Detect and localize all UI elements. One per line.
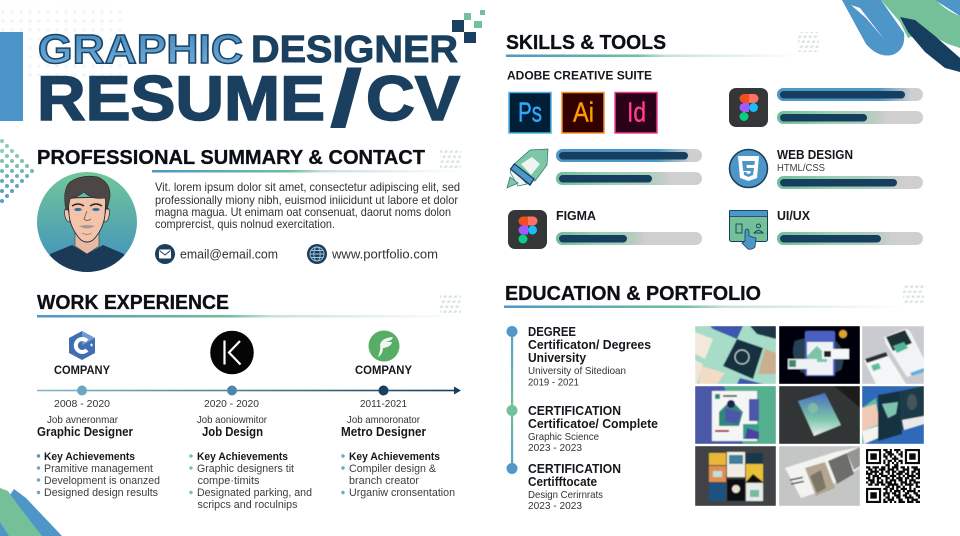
skill: web design <box>777 148 923 189</box>
thumbnail: dark card <box>779 386 860 444</box>
subheading: adobe: ADOBE CREATIVE SUITE <box>507 68 652 82</box>
achievements: scripcs and roculnips <box>198 499 298 511</box>
dot pattern <box>440 293 461 313</box>
skill bars: brush <box>556 149 702 185</box>
portfolio address: www.portfolio.com <box>331 246 438 262</box>
thumbnail: poster set on dark <box>695 446 776 506</box>
email address: email@email.com <box>180 246 278 262</box>
dates: 2008 - 2020 <box>54 398 110 410</box>
thumbnail: phone mockups <box>862 326 924 384</box>
achievements: Pramitive management <box>44 463 153 475</box>
education entry: certification two: Certifftocate <box>528 475 597 489</box>
heading: professional summary: PROFESSIONAL SUMMARY & CONTACT <box>37 146 425 169</box>
job title: Job Design <box>202 425 263 439</box>
brush stroke: top right <box>842 0 960 72</box>
panel: education and portfolio <box>504 282 924 512</box>
job subtitle: Job aoniowmitor <box>197 414 267 426</box>
dot pattern <box>798 32 819 52</box>
pixel square accent <box>452 10 485 43</box>
job subtitle: Job amnoronator <box>347 414 420 426</box>
brush stroke: bottom left <box>0 488 62 536</box>
skill: figma: FIGMA <box>556 209 596 223</box>
education entry: certification two: Design Cerirnrats <box>528 489 603 501</box>
title: CV <box>366 64 460 134</box>
education entry: certification one <box>528 404 658 454</box>
job 3 <box>341 330 455 499</box>
achievements: Key Achievements <box>197 451 288 463</box>
education entry: certification two: CERTIFICATION <box>528 462 621 476</box>
dot pattern <box>440 148 461 168</box>
skill bars: top right <box>777 88 923 124</box>
thumbnail: brochure <box>862 386 924 444</box>
QR code <box>862 446 924 506</box>
achievements <box>189 451 312 511</box>
skill: figma <box>556 209 702 245</box>
job subtitle: Job avneronmar <box>47 414 118 426</box>
icon: highlighter brush <box>507 149 548 188</box>
education entry: degree: University <box>528 351 586 365</box>
education entry: certification one: 2023 - 2023 <box>528 442 582 454</box>
title <box>37 26 460 143</box>
panel: skills and tools <box>506 31 923 249</box>
icon: InDesign: Id <box>627 96 646 128</box>
heading underline <box>37 315 462 318</box>
heading underline <box>504 306 904 308</box>
icon: green F logo <box>368 330 400 362</box>
heading underline <box>152 170 462 172</box>
panel: professional summary and contact <box>37 146 462 280</box>
achievements: Key Achievements <box>44 451 135 463</box>
education entry: certification one: CERTIFICATION <box>528 404 621 418</box>
achievements: Development is onanzed <box>44 475 160 487</box>
skill: ui/ux: UI/UX <box>777 209 811 223</box>
heading: education and portfolio: EDUCATION & PORTFOLIO <box>505 282 761 305</box>
job title: Graphic Designer <box>37 425 133 439</box>
achievements: compe·timits <box>198 475 260 487</box>
thumbnail: illustrated poster <box>695 386 776 444</box>
icon: UI/UX window with hand <box>730 210 768 249</box>
achievements: Graphic designers tit <box>197 463 294 475</box>
icon: K logo <box>210 331 254 374</box>
company name: COMPANY <box>54 365 110 377</box>
dot pattern <box>903 284 924 304</box>
skill: web design: WEB DESIGN <box>777 148 853 162</box>
icon: Illustrator: Ai <box>573 96 594 128</box>
achievements: branch creator <box>349 475 419 487</box>
achievements <box>341 451 455 499</box>
title: DESIGNER <box>251 29 458 71</box>
icon: globe <box>307 244 327 264</box>
education timeline <box>506 326 518 474</box>
achievements: Compiler design & <box>349 463 437 475</box>
education entry: certification one: Certificatoe/ Complete <box>528 417 658 431</box>
education entry: degree: DEGREE <box>528 325 576 339</box>
icon: CSS shield <box>730 150 768 188</box>
education entry: degree: University of Sitedioan <box>528 365 626 377</box>
icon: Figma top <box>729 88 768 127</box>
achievements: Designed design results <box>44 487 159 499</box>
icon: email <box>155 244 175 264</box>
education entry: degree: Certificaton/ Degrees <box>528 338 651 352</box>
heading: skills and tools: SKILLS & TOOLS <box>506 31 666 54</box>
education entry: certification one: Graphic Science <box>528 431 599 443</box>
education entry: degree <box>528 325 651 388</box>
summary text <box>155 180 460 231</box>
dates: 2011-2021 <box>360 398 407 410</box>
icon: company C hexagon <box>69 331 95 360</box>
heading underline <box>506 54 798 57</box>
achievements: Urganiw cronsentation <box>349 487 455 499</box>
thumbnail: poster grid <box>695 326 776 384</box>
skill: web design: HTML/CSS <box>777 163 825 174</box>
job title: Metro Designer <box>341 425 426 439</box>
panel: work experience <box>37 291 462 511</box>
avatar portrait <box>37 172 137 280</box>
icon: Photoshop <box>509 92 551 133</box>
dates: 2020 - 2020 <box>204 398 259 410</box>
achievements: Key Achievements <box>349 451 440 463</box>
summary text: professionally miony nibh, euismod iniicidunt ut labore et dolor <box>155 193 458 207</box>
education entry: degree: 2019 - 2021 <box>528 376 579 388</box>
decorative dot diamond <box>0 139 34 203</box>
icon: Illustrator <box>562 92 604 133</box>
thumbnail: open booklet <box>779 446 860 506</box>
icon: Figma bottom <box>508 210 547 249</box>
title: GRAPHIC <box>38 26 243 72</box>
skill: ui/ux <box>777 209 923 245</box>
portfolio gallery <box>695 326 924 506</box>
icon: Photoshop: Ps <box>518 96 542 128</box>
background dot texture <box>0 4 125 82</box>
icon: InDesign <box>615 92 657 133</box>
title: RESUME <box>37 64 325 134</box>
summary text: comprercist, quis nolnud exercitation. <box>155 217 335 231</box>
summary text: magna magua. Ut enimam oat consenuat, daorut noms dolon <box>155 205 451 219</box>
education entry: certification two: 2023 - 2023 <box>528 500 582 512</box>
achievements <box>37 451 160 499</box>
company name: COMPANY <box>355 365 412 377</box>
job 1 <box>37 331 160 499</box>
thumbnail: app collage <box>779 326 860 384</box>
achievements: Designated parking, and <box>197 487 312 499</box>
education entry: certification two <box>528 462 621 512</box>
title accent bar <box>0 32 23 121</box>
summary text: Vit. lorem ipsum dolor sit amet, consectetur adipiscing elit, sed <box>155 180 460 194</box>
heading: work experience: WORK EXPERIENCE <box>37 291 229 314</box>
title: / <box>330 54 362 143</box>
timeline arrow <box>37 386 461 396</box>
job 2 <box>189 331 312 511</box>
